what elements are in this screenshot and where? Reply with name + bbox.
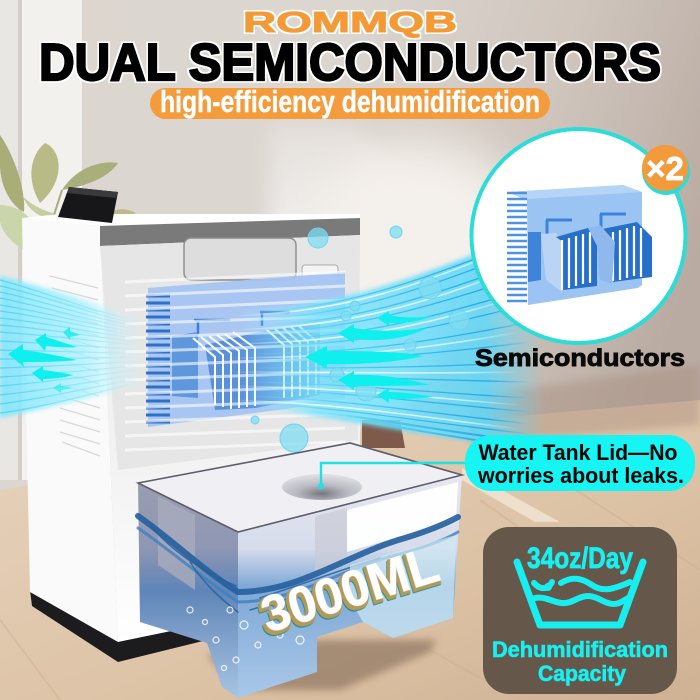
interior tube outline: [184, 238, 296, 280]
grey back panel: [315, 508, 347, 575]
icon: semiconductor heat sink: [507, 185, 652, 305]
interior top grey band: [100, 218, 360, 246]
airflow arrows: outlet: [8, 327, 80, 393]
tank lid: [138, 443, 462, 532]
right streaks white: [230, 243, 520, 429]
blue semiconductor module inside unit: [146, 272, 345, 427]
water tank: [138, 443, 462, 698]
left side grille slats: [50, 276, 100, 456]
vent box: [302, 265, 338, 287]
icon: water basin: [517, 562, 643, 625]
right water pale area: [350, 535, 456, 638]
title: DUAL SEMICONDUCTORS: [39, 34, 661, 92]
left side panel: [22, 218, 118, 642]
moisture bubbles: [251, 226, 469, 452]
icon: potted plant leaves: [0, 135, 136, 262]
tank left face: [138, 483, 238, 698]
panel: dehumidification capacity: [483, 527, 677, 694]
subtitle pill: high-efficiency dehumidification: [160, 84, 540, 119]
black control display: [58, 187, 118, 223]
callout: water tank lid: Water Tank Lid—No: [478, 440, 678, 465]
callout: water tank lid: worries about leaks.: [477, 463, 684, 488]
capacity label: 3000ML: [254, 536, 445, 643]
white front slats: [125, 272, 345, 450]
capacity value: 34oz/Day: [527, 542, 633, 575]
label: Semiconductors: Semiconductors: [475, 345, 685, 372]
callout leader line: [318, 463, 470, 489]
bubbles in water: [187, 607, 304, 670]
left streaks: [0, 280, 145, 413]
black base: [30, 590, 207, 662]
bright interior panel: [347, 482, 458, 552]
floor shadow under unit: [207, 640, 436, 690]
dehumidifier body: [22, 187, 436, 690]
airflow arrows: intake: [305, 311, 433, 403]
front panel: [100, 218, 360, 642]
water surface band: [138, 516, 458, 612]
brand logo: ROMMQB: [243, 7, 457, 39]
airflow streaks: [0, 232, 545, 448]
badge: times two: ×2: [646, 150, 684, 187]
interior back plate: [100, 235, 360, 470]
callout: water tank lid: [465, 435, 695, 491]
panel: semiconductor callout circle: [472, 129, 690, 343]
inner panels seen through tank: [158, 496, 195, 590]
top white edge: [22, 214, 360, 226]
background: wooden floor: [0, 365, 700, 700]
capacity label: Dehumidification: [492, 637, 668, 662]
tank right face: [238, 475, 462, 698]
airflow glow: [240, 232, 545, 446]
lid funnel: [282, 474, 362, 500]
badge: times two: [642, 145, 690, 195]
panel: dehumidification capacity: Capacity: [538, 661, 627, 686]
right streaks blue: [250, 238, 530, 448]
